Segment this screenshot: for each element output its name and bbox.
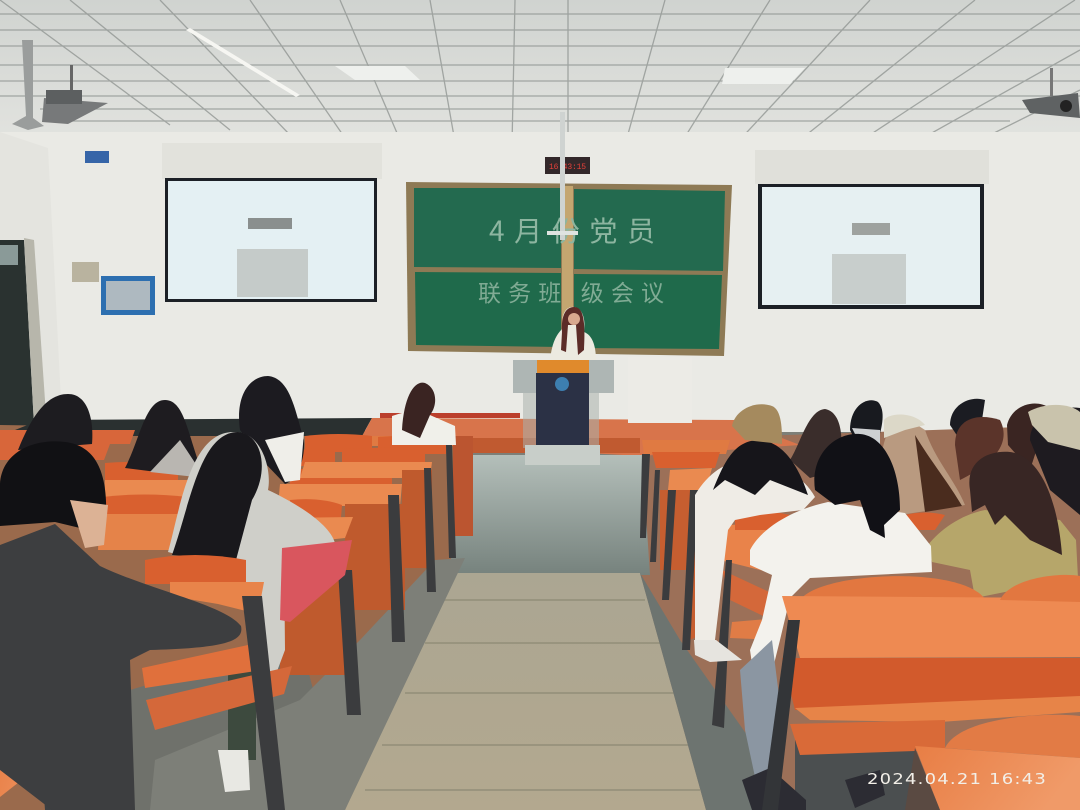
projector right bbox=[1022, 68, 1080, 118]
platform bbox=[0, 357, 800, 456]
door bbox=[0, 238, 46, 428]
right seating base bbox=[640, 425, 1080, 810]
back wall bbox=[0, 132, 1080, 432]
left side wall bbox=[0, 132, 62, 428]
student front left dark jacket bbox=[0, 441, 241, 810]
left display bbox=[165, 178, 377, 302]
wall signs bbox=[72, 151, 155, 315]
screen casing left bbox=[162, 143, 382, 179]
right desks bbox=[640, 440, 945, 728]
lectern bbox=[513, 360, 614, 465]
board chalk text line two: 联务班 级会议 bbox=[478, 274, 664, 308]
student olive top bbox=[928, 452, 1078, 598]
student white shirt centre right bbox=[740, 434, 932, 810]
blackboard bbox=[406, 182, 732, 356]
students rear right bbox=[790, 399, 1080, 515]
right front desk bbox=[762, 575, 1080, 810]
centre floor bbox=[448, 455, 650, 575]
right steps bbox=[640, 573, 800, 810]
left steps bbox=[150, 558, 465, 810]
projector ceiling fan left bbox=[12, 40, 108, 130]
seated students rear left bbox=[18, 376, 456, 484]
screen casing right bbox=[755, 150, 989, 184]
right display bbox=[758, 184, 984, 309]
speaker bbox=[550, 307, 596, 361]
board chalk text line one: 4月份党员 bbox=[489, 210, 655, 250]
student centre left grey jacket bbox=[168, 432, 352, 792]
left lower floor bbox=[130, 640, 345, 810]
hanging pole bbox=[547, 112, 578, 240]
left seating base bbox=[0, 425, 470, 810]
left desks front bbox=[0, 555, 292, 810]
timestamp: 2024.04.21 16:43 bbox=[867, 770, 1047, 788]
ceiling bbox=[0, 0, 1080, 150]
digital clock bbox=[545, 157, 590, 174]
left desks back rows bbox=[0, 430, 473, 715]
aisle stairs bbox=[345, 573, 706, 810]
student beige cap white top bbox=[694, 404, 815, 662]
digital clock: 16:43:15 bbox=[549, 163, 586, 172]
